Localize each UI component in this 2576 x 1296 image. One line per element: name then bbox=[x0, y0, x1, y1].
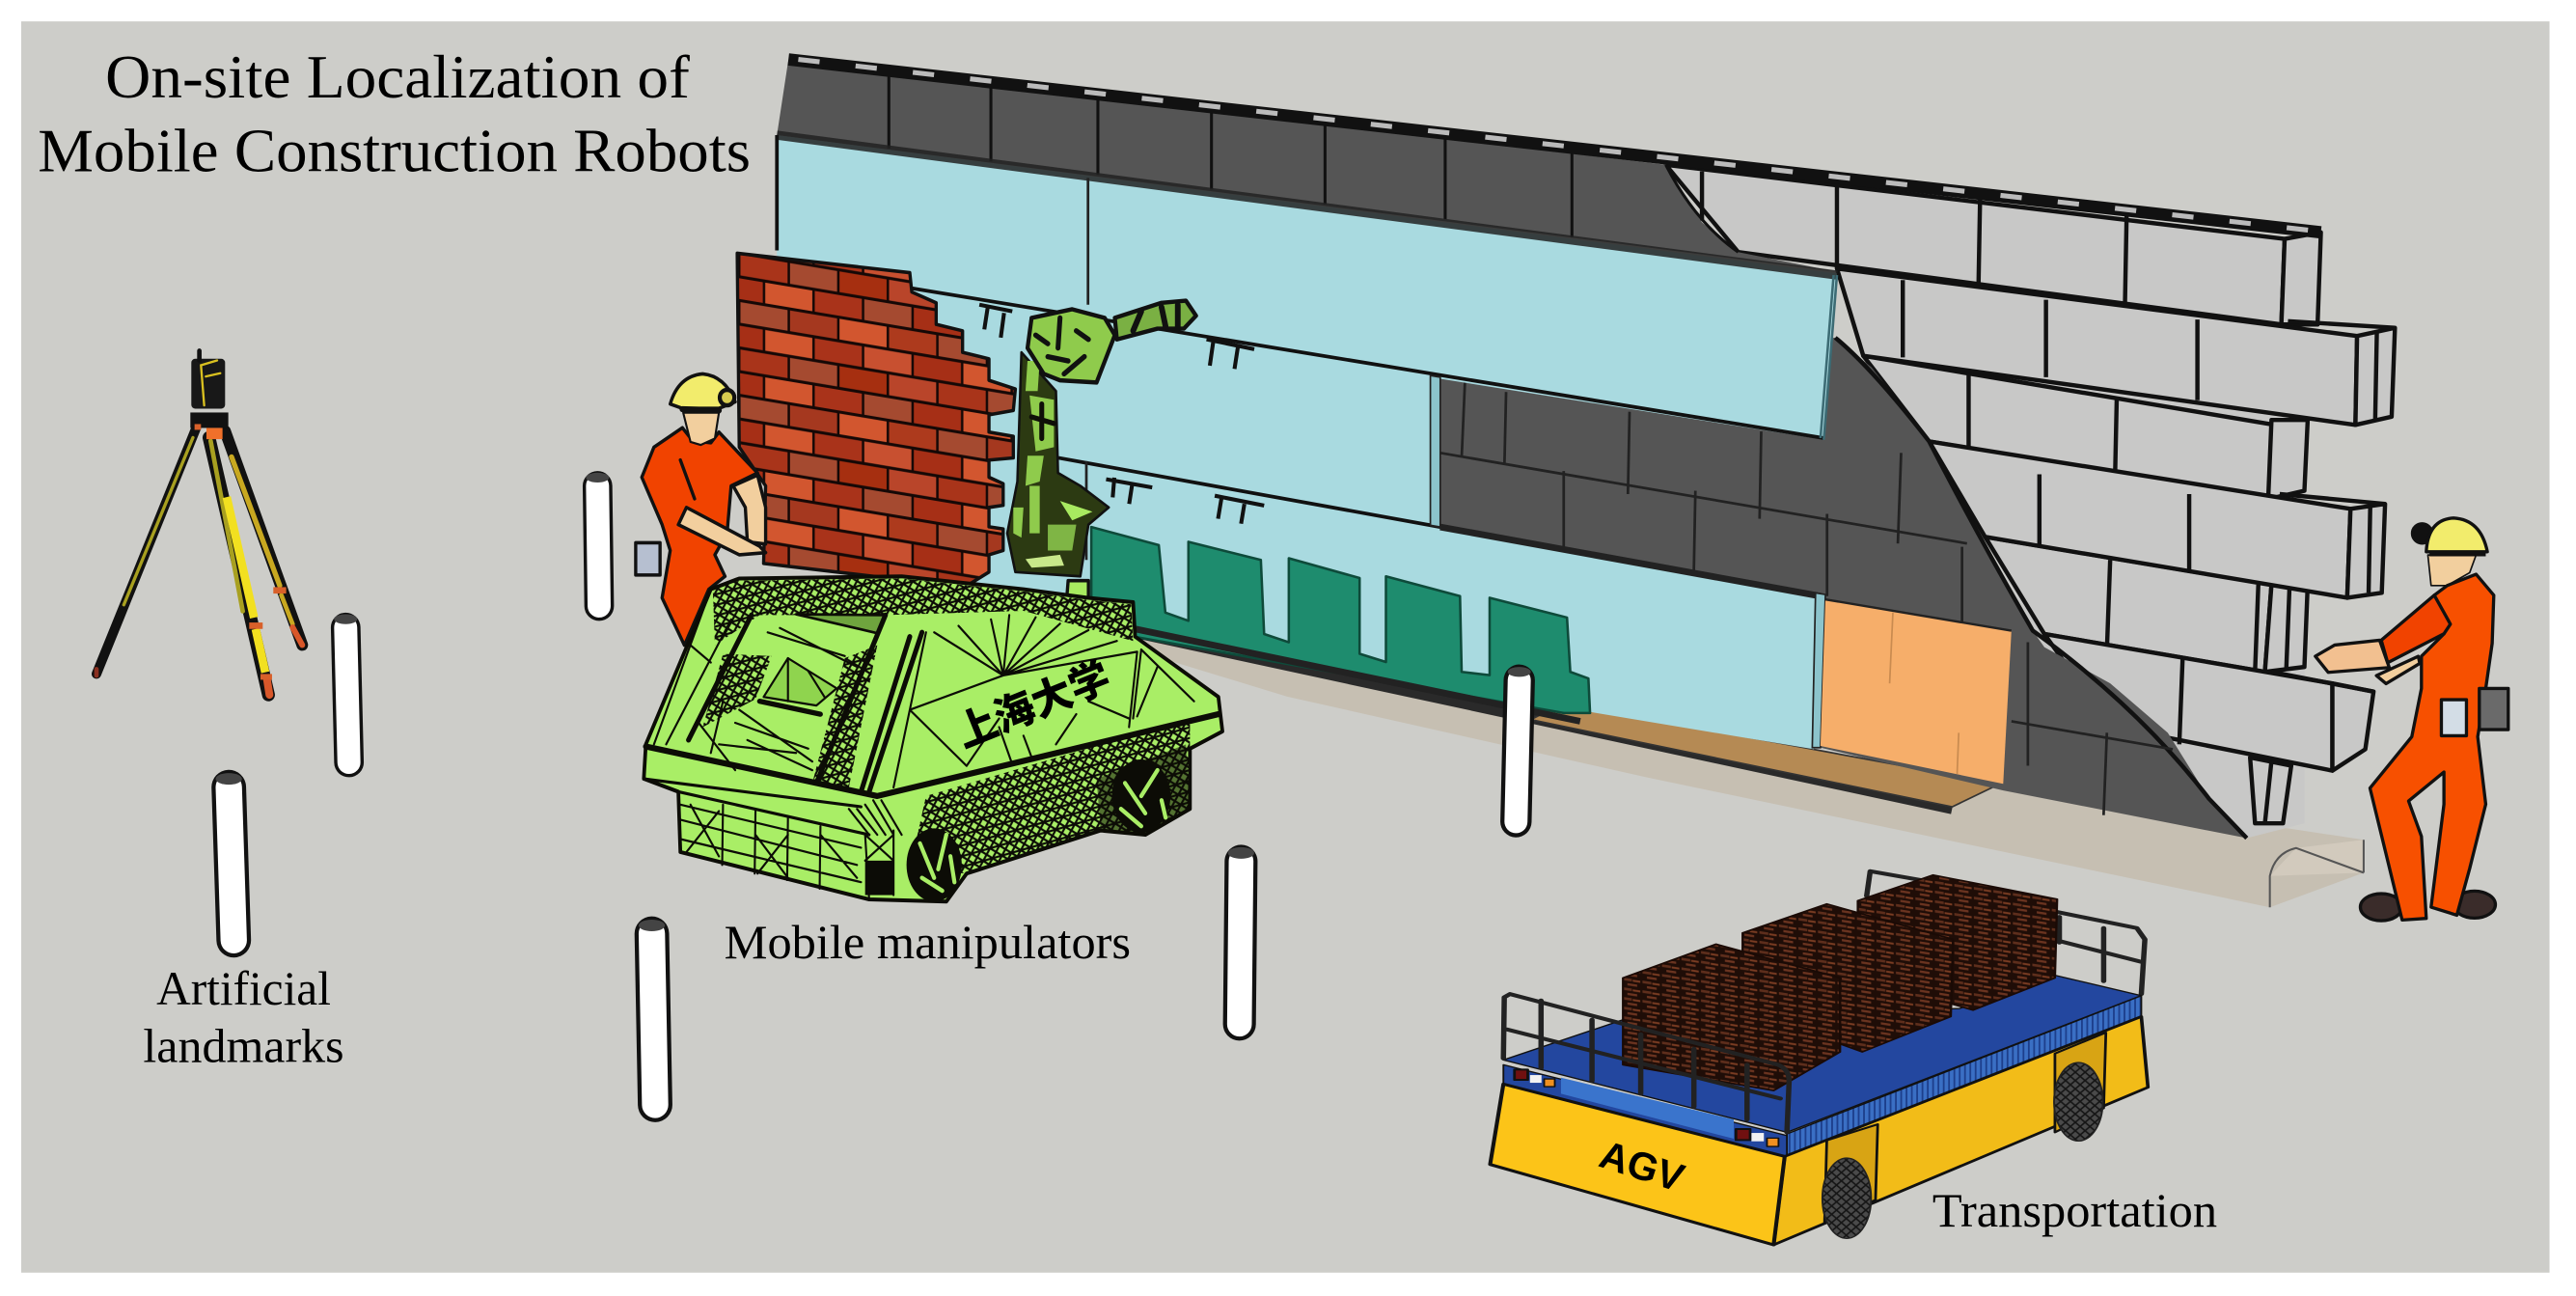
concrete block wall bbox=[1666, 165, 2395, 839]
AGV far rail bbox=[1867, 871, 2145, 994]
orange board bbox=[1821, 599, 2012, 784]
robot window panes bbox=[763, 658, 836, 705]
title: Mobile Construction Robots bbox=[38, 118, 751, 185]
AGV wheels bbox=[1822, 1062, 2103, 1238]
exposed dark block backing bbox=[1440, 338, 2247, 839]
AGV lettering: AGV bbox=[1595, 1132, 1690, 1200]
worker left bbox=[636, 373, 766, 646]
mobile manipulator robot bbox=[644, 576, 1222, 901]
dark rail over foam base bbox=[1136, 629, 1580, 721]
pallet stack near bbox=[1623, 944, 1840, 1090]
insulation panels bbox=[777, 135, 1837, 749]
block course 3 bbox=[1863, 356, 2308, 499]
AGV tail lights bbox=[1515, 1069, 1778, 1146]
red brick stack bbox=[737, 253, 1015, 587]
rail under insulation bbox=[1136, 632, 1952, 809]
landmark 3 bbox=[215, 773, 242, 940]
AGV side strip bbox=[1787, 996, 2141, 1156]
robot fan lines bbox=[893, 615, 1194, 787]
AGV front strip bbox=[1503, 1064, 1787, 1156]
label: mobile manipulators: Mobile manipulators bbox=[725, 916, 1131, 969]
block course 4 bbox=[1930, 441, 2385, 597]
AGV body side bbox=[1773, 1016, 2148, 1245]
robot left face lines bbox=[654, 590, 857, 770]
label: artificial landmarks: Artificial bbox=[156, 962, 331, 1015]
landmark 6 bbox=[1508, 667, 1531, 821]
AGV near rail bbox=[1503, 994, 1789, 1132]
landmark 2 bbox=[334, 615, 357, 762]
robot base lines bbox=[680, 800, 902, 899]
landmark 1 bbox=[586, 473, 609, 606]
robot dense mesh regions bbox=[702, 654, 772, 727]
robot body silhouette bbox=[644, 576, 1222, 901]
pallet stack far bbox=[1858, 875, 2057, 1010]
block course 6 bbox=[2044, 634, 2373, 771]
block course 2 bbox=[1837, 268, 2395, 425]
block course 5 bbox=[1986, 537, 2308, 672]
robot wheels bbox=[865, 861, 893, 896]
landmark 4 bbox=[639, 920, 665, 1105]
green foam strip bbox=[1091, 527, 1590, 713]
label: artificial landmarks bbox=[143, 962, 344, 1073]
wall clips bbox=[979, 305, 1264, 524]
pouch left bbox=[636, 542, 660, 575]
AGV vehicle bbox=[1490, 871, 2148, 1245]
brick, arm, worker and robot cluster bbox=[636, 253, 1222, 901]
robot arm bbox=[1007, 301, 1196, 606]
worker right bbox=[2316, 518, 2508, 921]
title bbox=[38, 43, 751, 185]
top course of dark blocks bbox=[777, 60, 1837, 272]
AGV deck bbox=[1503, 975, 2141, 1132]
AGV wheel wells bbox=[1824, 1033, 2106, 1223]
AGV body front bbox=[1490, 1084, 1785, 1245]
robot roof band bbox=[713, 578, 1133, 646]
block course 7 bbox=[2250, 758, 2291, 823]
foundation curb bbox=[1136, 639, 2364, 907]
brown base plate bbox=[1531, 703, 2000, 807]
artificial landmarks bbox=[215, 473, 1531, 1105]
wall top edge with block hollows bbox=[788, 60, 2321, 233]
robot structural lines bbox=[645, 714, 1219, 796]
landmark 5 bbox=[1228, 847, 1254, 1024]
total station tripod bbox=[96, 350, 302, 695]
pallet stack middle bbox=[1742, 904, 1953, 1052]
label: artificial landmarks: landmarks bbox=[143, 1020, 344, 1073]
block course 1 bbox=[1666, 165, 2321, 324]
label: transportation: Transportation bbox=[1932, 1184, 2217, 1237]
title: On-site Localization of bbox=[105, 43, 691, 111]
right boots bbox=[2360, 894, 2402, 921]
robot lettering: 上海大学 bbox=[946, 645, 1118, 759]
